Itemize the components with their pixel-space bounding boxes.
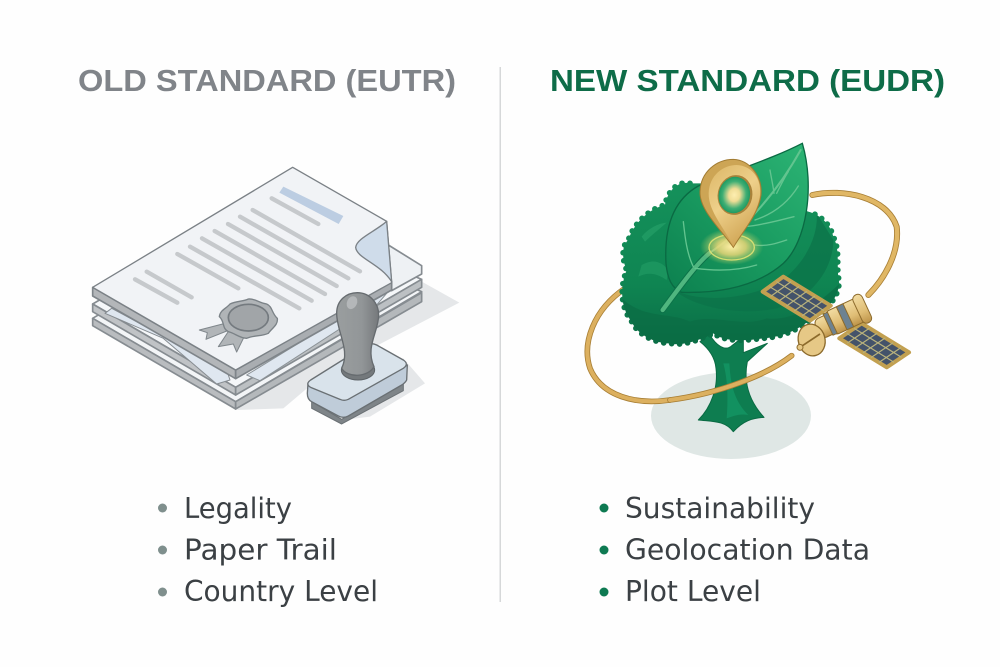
stamp shadow (343, 358, 425, 420)
item: plot level: Plot Level (625, 575, 761, 608)
rear outline (587, 288, 670, 401)
heading: old standard: OLD STANDARD (EUTR) (78, 63, 456, 98)
satellite (763, 277, 909, 367)
dish bowl (795, 321, 829, 359)
wax seal with ribbon (199, 299, 277, 352)
solar panel left (763, 277, 831, 321)
orbit right outline (812, 193, 897, 295)
ring (709, 235, 754, 260)
loose blue sheet left (105, 308, 230, 384)
illustration: stack of paper documents with stamp (93, 167, 459, 424)
glow (700, 228, 763, 265)
pin hole (714, 172, 756, 218)
item: geolocation data: Geolocation Data (625, 534, 870, 566)
item: paper trail: Paper Trail (184, 534, 337, 566)
top sheet edge (93, 287, 236, 379)
loose blue sheet right (247, 293, 387, 381)
rubber stamp (307, 293, 407, 424)
seal ribbon (199, 323, 245, 352)
bottom sheet (93, 222, 422, 409)
stamp handle (337, 293, 379, 375)
ground shadow (651, 372, 811, 459)
middle sheet (93, 208, 422, 395)
document text lines (135, 198, 360, 308)
satellite body (811, 293, 873, 343)
stamp plate (312, 383, 403, 424)
item: country level: Country Level (184, 575, 378, 608)
canopy lower shading (622, 284, 839, 344)
pin face (709, 165, 760, 247)
tree trunk (698, 334, 767, 432)
trunk highlight (723, 363, 748, 418)
stamp base front (307, 365, 407, 417)
tree canopy (620, 183, 843, 350)
shadow beneath leaf (679, 216, 834, 304)
orbit rear left part (587, 288, 670, 401)
canopy highlight left (638, 261, 668, 280)
item: legality: Legality (184, 492, 292, 525)
paper shadow (237, 281, 459, 410)
leaf stem and veins (663, 150, 801, 310)
orbit right part (812, 193, 897, 295)
list: new standard (600, 492, 870, 608)
location pin (700, 159, 761, 247)
canopy body (622, 183, 839, 344)
top sheet (93, 167, 392, 370)
dish antenna (800, 334, 820, 347)
top sheet right edge (236, 282, 392, 379)
canopy highlight upper (642, 223, 667, 242)
pin side (700, 159, 761, 247)
illustration: tree, leaf, location pin and satellite (587, 143, 909, 459)
list: old standard (158, 492, 378, 608)
orbit front part (670, 356, 792, 400)
orbit right fill (812, 193, 897, 295)
front fill (670, 356, 792, 400)
document title block (279, 187, 343, 224)
rear fill (587, 288, 670, 401)
pin hole glow (715, 174, 753, 216)
curled page corner (356, 221, 392, 282)
heading: new standard: NEW STANDARD (EUDR) (550, 63, 945, 98)
front outline (670, 356, 792, 400)
stamp base top (308, 344, 406, 400)
canopy scalloped edge (622, 183, 839, 344)
handle highlight (345, 295, 359, 311)
stamp collar (341, 360, 375, 380)
satellite dish (795, 321, 829, 359)
seal rosette (219, 299, 277, 338)
glow ring under pin (700, 228, 763, 265)
leaf blade (666, 143, 808, 292)
solar panel right (839, 323, 909, 367)
rear sheet edge (388, 245, 422, 291)
item: sustainability: Sustainability (625, 492, 815, 525)
seal centre (228, 304, 268, 331)
dish feed (797, 344, 803, 350)
leaf (663, 143, 808, 310)
